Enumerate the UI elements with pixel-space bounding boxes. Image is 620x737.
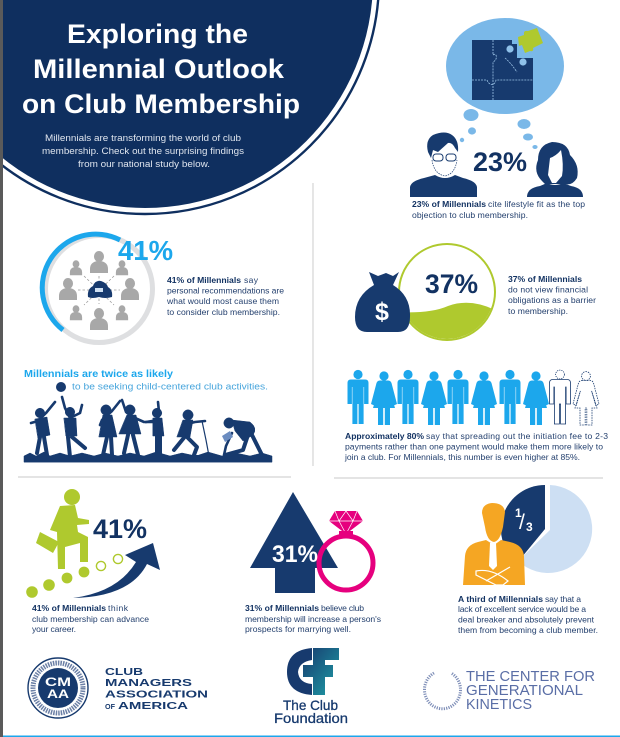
text: recommendations: personal recommendations are: [167, 286, 284, 296]
banner intro text: from our national study below.: [78, 159, 210, 170]
text: service: them from becoming a club member.: [458, 625, 598, 635]
text: marrying: believe club: [321, 603, 364, 613]
logo: The Center for Generational Kinetics: THE CENTER FOR: [466, 669, 595, 685]
panel: lifestyle fit puzzle: [410, 18, 585, 220]
logo: CMAA: CLUB: [105, 666, 144, 678]
fraction: 1/3: [515, 506, 533, 534]
logo: CMAA: AA: [47, 687, 69, 701]
panel: initiation fee: [344, 370, 608, 462]
banner: title circle: [0, 0, 379, 214]
logo: CMAA: AMERICA: [118, 700, 189, 712]
icon: climbing person: [36, 489, 89, 569]
text: career: 41% of Millennials: [32, 603, 106, 613]
icon: money bag: [355, 272, 410, 332]
dividers: [18, 183, 603, 478]
logo: CMAA: ASSOCIATION: [105, 688, 208, 700]
text: lifestyle fit: objection to club membership.: [412, 210, 528, 220]
text: initiation fee: join a club. For Millennials, this number is even higher at 85%.: [344, 452, 580, 462]
text: financial: to membership.: [508, 306, 568, 316]
bottom rule: [3, 736, 620, 737]
stat: 41% navy: 41%: [93, 514, 147, 544]
banner intro text: membership. Check out the surprising findings: [42, 146, 244, 157]
text: career: think: [108, 603, 129, 613]
panel: personal recommendations: [42, 234, 284, 342]
text: financial: 37% of Millennials: [508, 274, 582, 284]
fraction: 1/3: /: [519, 511, 525, 534]
text: financial: do not view financial: [508, 284, 588, 294]
text: recommendations: what would most cause them: [166, 296, 279, 306]
fraction: 1/3: 1: [515, 506, 522, 520]
icon: money bag: $: [375, 298, 389, 326]
icon: stepping dots: [26, 554, 123, 598]
text: service: deal breaker and absolutely prevent: [458, 614, 595, 624]
logo: The Center for Generational Kinetics: GENERATIONAL: [466, 683, 583, 699]
icon: man arms crossed: [463, 503, 525, 585]
title: Exploring the: [67, 19, 248, 49]
left edge strip: [0, 0, 3, 737]
text: service: say that a: [545, 594, 581, 604]
text: initiation fee: Approximately 80%: [345, 431, 424, 441]
logo: CMAA: OF: [105, 704, 116, 711]
text: child-centered: to be seeking child-centered club activities.: [72, 382, 268, 392]
title: Millennial Outlook: [33, 54, 284, 84]
text: career: your career.: [32, 624, 76, 634]
text: recommendations: to consider club membership.: [167, 307, 280, 317]
title: on Club Membership: [22, 89, 300, 119]
text: recommendations: 41% of Millennials: [167, 275, 241, 285]
fraction: 1/3: 3: [526, 520, 533, 534]
logo: CMAA: MANAGERS: [105, 677, 192, 689]
text: career: club membership can advance: [32, 614, 149, 624]
text: service: A third of Millennials: [458, 594, 543, 604]
logo: CMAA: CM: [45, 675, 71, 689]
banner intro text: [42, 133, 244, 170]
icon: woman silhouette: [527, 142, 583, 197]
icon: ball: [56, 382, 66, 392]
icon: flower: [222, 431, 233, 442]
icon: rising arrow: [73, 543, 160, 598]
icon: thought bubble: [446, 18, 564, 149]
text: marrying: prospects for marrying well.: [245, 624, 351, 634]
stat: 23%: 23%: [473, 147, 527, 177]
panel: marrying well: [245, 492, 381, 634]
text: marrying: 31% of Millennials: [245, 603, 319, 613]
logo: The Center for Generational Kinetics: [424, 669, 595, 713]
chart: people pictogram 80%: [348, 370, 599, 425]
icon: man silhouette: [410, 132, 477, 197]
panel: career: [26, 489, 160, 634]
stat: 37%: 37%: [425, 269, 478, 299]
panel: service: [458, 485, 598, 635]
title: [22, 19, 300, 119]
text: lifestyle fit: cite lifestyle fit as the top: [488, 199, 585, 209]
text: initiation fee: payments rather than one payment would make them more likely to: [345, 442, 603, 452]
illustration: children silhouettes: [24, 397, 272, 462]
logo: The Club Foundation: The Club: [283, 697, 338, 713]
text: marrying: membership will increase a person's: [245, 614, 381, 624]
text: financial: obligations as a barrier: [508, 295, 596, 305]
stat: 41% blue: 41%: [118, 235, 173, 266]
icon: puzzle: [472, 28, 543, 100]
stat: 31%: 31%: [272, 541, 318, 568]
icon: network of people: [59, 251, 139, 330]
icon: up arrow: [250, 492, 338, 593]
chart: 37% circle: [395, 244, 495, 345]
text: recommendations: say: [244, 275, 259, 285]
banner intro text: Millennials are transforming the world of club: [45, 133, 241, 144]
heading: twice as likely: Millennials are twice as likely: [24, 368, 173, 380]
logo: The Club Foundation: [274, 648, 348, 726]
chart: 41% ring: [42, 234, 152, 342]
text: lifestyle fit: 23% of Millennials: [412, 199, 486, 209]
chart: one-third pie: [501, 485, 592, 573]
icon: diamond ring: [319, 511, 373, 590]
logo: The Club Foundation: Foundation: [274, 710, 348, 726]
panel: child-centered activities: [24, 368, 272, 462]
logo: The Center for Generational Kinetics: KINETICS: [466, 697, 532, 713]
text: initiation fee: say that spreading out the initiation fee to 2-3: [426, 431, 608, 441]
panel: financial obligations: [355, 244, 596, 345]
logo: CMAA: [28, 658, 208, 718]
text: service: lack of excellent service would be a: [458, 604, 586, 614]
